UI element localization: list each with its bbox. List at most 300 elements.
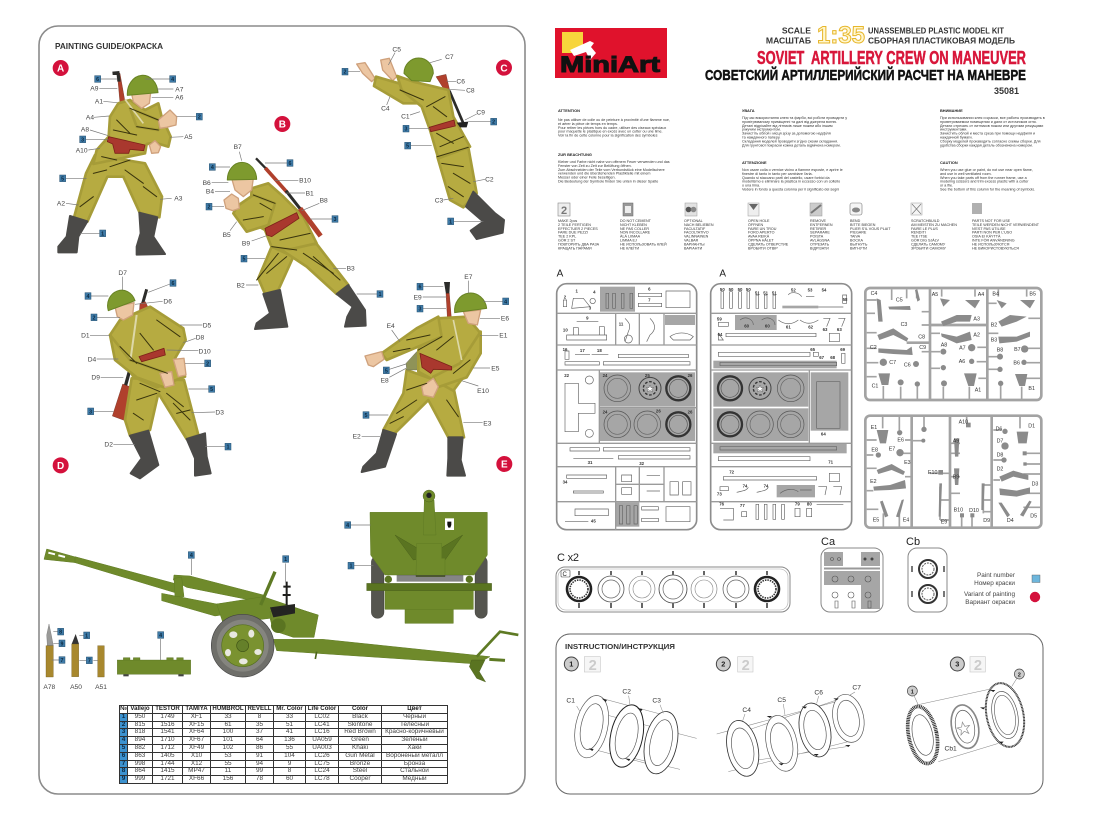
labels: soldier D: D8 [196, 335, 205, 342]
table: paint colour chart: 6 [122, 752, 125, 759]
sprue: Cb: Cb [906, 536, 920, 548]
symbol captions: BITTE BIEGEN [850, 223, 876, 227]
part numbers: E2 [870, 479, 877, 485]
part numbers A front: 26 [688, 373, 693, 378]
part numbers: A8 [941, 343, 947, 349]
text block: attention column 3: modeling scissors and trim excess plastic with a cutter [940, 180, 1029, 184]
heading: instruction: INSTRUCTION/ИНСТРУКЦИЯ [565, 642, 675, 651]
labels: soldier C: C1 [401, 114, 410, 121]
part numbers A rear: 61 [786, 324, 791, 329]
table: paint colour chart: 9 [288, 760, 291, 767]
table: paint colour chart: Skintone [348, 721, 372, 728]
part numbers: C6 [904, 363, 911, 369]
table: paint colour chart: 55 [286, 744, 293, 751]
table: paint colour chart: Хаки [407, 744, 422, 751]
table: paint colour chart: 11 [225, 767, 231, 774]
text block: attention column 1: et aérer la pièce de temps en temps. [558, 122, 618, 126]
labels: soldier A: A10 [76, 147, 88, 154]
part numbers A front: 1 [575, 288, 578, 293]
symbol captions: НЕ ВИКОРИСТОВУЮТЬСЯ [972, 246, 1019, 250]
step 3: 2 [1018, 672, 1021, 678]
part numbers A rear: 51 [763, 290, 769, 295]
part numbers A rear: 74 [743, 484, 748, 489]
part numbers: B6 [1013, 360, 1020, 366]
part numbers: D10 [969, 508, 979, 514]
step 3: 1 [911, 689, 914, 695]
table: paint colour chart: XF64 [189, 728, 204, 735]
symbol captions: FACOLTATIVO [684, 231, 709, 235]
symbol captions: OPEN HOLE [748, 219, 770, 223]
symbol captions: ВІДРІЗАТИ [810, 246, 829, 250]
labels: soldier D: 3 [89, 409, 92, 415]
kit number: 35081 [994, 86, 1019, 96]
symbol captions: ÄLÄ LIIMAA [620, 235, 641, 239]
labels: soldier B [203, 144, 383, 298]
table: paint colour chart: Телесный [400, 721, 429, 728]
labels: soldier C: C7 [445, 54, 454, 61]
paint number callouts: 7 [61, 658, 64, 664]
table: paint colour chart: 99 [256, 767, 263, 774]
step 2: C4 [742, 707, 751, 714]
part numbers: E3 [904, 460, 911, 466]
table: paint colour chart: Vallejo [130, 705, 150, 712]
labels: soldier C: C2 [485, 177, 494, 184]
ammunition: shells: A50 [70, 684, 82, 691]
labels: soldier A: A7 [175, 86, 184, 93]
text block: attention column 3: удобства сборки каждая деталь обозначена номером. [940, 143, 1033, 147]
table: paint colour chart: 818 [135, 728, 145, 735]
part numbers: E6 [897, 437, 904, 443]
part numbers A front: 26 [656, 408, 661, 413]
step 3: 3 [955, 660, 959, 669]
legend: paint number and variant [964, 572, 1040, 606]
sprue: A front [557, 268, 697, 530]
symbol captions: REMOVE [810, 219, 827, 223]
symbol captions: СДЕЛАТЬ ОТВЕРСТИЕ [748, 242, 789, 246]
heading: painting guide: PAINTING GUIDE/ОКРАСКА [55, 41, 163, 51]
part numbers A front: 10 [563, 328, 568, 333]
part numbers: C3 [901, 322, 907, 328]
step 2 [716, 657, 868, 779]
part numbers: D6 [996, 427, 1002, 433]
table: paint colour chart: Gun Metal [345, 752, 375, 759]
part numbers A rear: 50 [729, 287, 734, 292]
paint number callouts: 8 [59, 630, 62, 636]
table: paint colour chart: 104 [284, 752, 295, 759]
table: paint colour chart: 2 [122, 721, 125, 728]
icon: optional [685, 203, 697, 216]
step 1: 1 [569, 660, 573, 669]
table: paint colour chart: Красно-коричневый [385, 728, 444, 735]
sprue: A rear: A [719, 268, 726, 279]
labels: soldier A: A9 [90, 86, 99, 93]
table: paint colour chart: UA003 [312, 744, 332, 751]
labels: soldier E: E9 [414, 294, 422, 301]
table: paint colour chart: Green [351, 736, 369, 743]
symbol captions: ÖFFNEN [748, 223, 763, 227]
symbol captions: НЕ КЛЕЇТИ [620, 246, 639, 250]
illustration: artillery gun and ammunition [43, 490, 518, 691]
icon: remove [810, 203, 822, 216]
part numbers: E1 [871, 425, 877, 431]
figure: soldier C [342, 46, 512, 239]
heading: scale and kit type: SCALE [782, 26, 811, 36]
text block: attention column 3: CAUTION [940, 160, 958, 165]
text block: attention column 2: Деталі відрізайте від літників лише ножем або іншим [742, 124, 833, 128]
table: paint colour chart: 41 [286, 728, 293, 735]
paint number callouts: 9 [61, 641, 64, 647]
figure body parts [873, 423, 1032, 517]
table: paint colour chart: Red Brown [344, 728, 376, 735]
labels: soldier A: A6 [175, 95, 184, 102]
table: paint colour chart: XF15 [189, 721, 204, 728]
legend: paint number and variant: Вариант окраски [965, 599, 1015, 606]
symbol captions: BEND [850, 219, 861, 223]
labels: soldier B: B7 [234, 144, 242, 151]
part numbers A front: 26 [688, 409, 693, 414]
labels: soldier E: 5 [385, 368, 388, 374]
part numbers A rear: 65 [810, 347, 816, 352]
labels: soldier A: 5 [61, 176, 64, 182]
table: paint colour chart: Цвет [407, 705, 422, 712]
step 3: Cb1 [945, 746, 957, 753]
labels: soldier C: 2 [344, 70, 347, 76]
part numbers A front: 45 [591, 518, 596, 523]
part numbers: D3 [1032, 481, 1038, 487]
table: paint colour chart: 894 [135, 736, 145, 743]
labels: soldier A: A4 [86, 115, 94, 122]
table: paint colour chart: 1516 [160, 721, 175, 728]
sprue: A rear [711, 268, 852, 530]
part numbers A rear: 69 [840, 347, 846, 352]
table: paint colour chart: Зеленый [401, 736, 428, 743]
text block: attention column 3: Детали отрезать от литников ножом или другими режущими [940, 124, 1043, 128]
symbol captions: TEILE WERDEN NICHT VERWENDENT [972, 223, 1040, 227]
symbol captions: ПОВТОРИТЬ ДВА РАЗА [558, 242, 600, 246]
symbol captions: PARTS NOT FOR USE [972, 219, 1011, 223]
figure: soldier A [53, 60, 202, 255]
symbol captions: ENTFERNEN [810, 223, 833, 227]
symbol captions: INTE FÖR ANVÄNDNING [972, 238, 1015, 242]
text block: attention column 2: o una lima. [742, 184, 760, 188]
badge: variant A: A [57, 64, 64, 75]
part numbers A rear: 60 [744, 324, 750, 329]
labels: soldier C: C8 [466, 88, 475, 95]
icon: make twice: 2 [561, 205, 567, 217]
part numbers A rear: 50 [746, 287, 751, 292]
heading: scale and kit type: UNASSEMBLED PLASTIC MODEL KIT [868, 26, 1004, 36]
text block: attention column 1: Die Bedeutung der Symbole finden Sie unten in dieser Spalte [558, 180, 658, 184]
step 3 [903, 657, 1030, 766]
part numbers A rear [717, 287, 848, 508]
part numbers: A10 [959, 419, 968, 425]
table: paint colour chart: 8 [122, 767, 125, 774]
labels: soldier A: A3 [174, 196, 183, 203]
part numbers A front: 7 [648, 298, 651, 303]
badge: variant D: D [57, 461, 64, 472]
symbol captions: TEE 2 KPL [558, 235, 576, 239]
text block: attention column 3: When you take parts off from the runner frame, use a [940, 176, 1028, 180]
symbol captions: ЗРОБИТИ САМОМУ [911, 246, 947, 250]
symbol captions: PARTI NON PER L'USO [972, 231, 1012, 235]
part numbers A rear: 50 [738, 287, 743, 292]
symbol captions: SCRATCHBUILD [911, 219, 940, 223]
text block: attention column 2 [742, 108, 847, 192]
part numbers A rear: 60 [765, 324, 770, 329]
labels: soldier B: B8 [320, 198, 328, 205]
part numbers: E7 [889, 447, 895, 453]
table: paint colour chart: 882 [135, 744, 145, 751]
labels: soldier A: A2 [57, 201, 65, 208]
gun: side view [44, 549, 518, 682]
part numbers A front: 17 [580, 348, 585, 353]
labels: soldier C: 5 [406, 144, 409, 150]
heading: scale and kit type: СБОРНАЯ ПЛАСТИКОВАЯ МОДЕЛЬ [868, 36, 1015, 46]
part numbers: D4 [1007, 518, 1014, 524]
table: paint colour chart: 864 [135, 767, 145, 774]
symbol captions: SEPARARE [810, 231, 830, 235]
figure body parts [877, 289, 1035, 387]
logo: MiniArt [555, 28, 667, 78]
labels: soldier C: C9 [476, 109, 485, 116]
symbol captions: FARE DUE PEZZI [558, 231, 588, 235]
part numbers A front: 18 [597, 348, 602, 353]
labels: soldier A: A8 [81, 126, 89, 133]
table: paint colour chart: 7 [122, 760, 125, 767]
symbol legend [558, 203, 1040, 250]
labels: soldier B: B6 [203, 180, 211, 187]
icon: do not cement [623, 203, 633, 216]
part numbers: C2 [870, 345, 877, 351]
wheel rings on sprue C [567, 575, 779, 603]
table: paint colour chart: LC78 [314, 775, 330, 782]
text block: attention column 2: провітрюваному приміщенні та далі від джерела вогню. [742, 120, 837, 124]
text block: attention column 2: УВАГА [742, 108, 755, 113]
table: paint colour chart: 3 [122, 728, 125, 735]
labels: soldier D: D9 [91, 375, 100, 382]
labels: soldier E: E8 [381, 377, 389, 384]
symbol captions: PIEGARE [850, 231, 867, 235]
labels: soldier D: D1 [81, 333, 90, 340]
part numbers A front [563, 287, 693, 523]
table: paint colour chart: TESTOR [155, 705, 180, 712]
table: paint colour chart: Черный [403, 713, 426, 720]
labels: soldier B: 5 [243, 257, 246, 263]
text block: attention column 1: ZUR BEACHTUNG [558, 152, 592, 157]
table: paint colour chart: REVELL [247, 705, 272, 712]
paint number callouts: 4 [190, 553, 193, 559]
labels: soldier D [81, 270, 231, 451]
labels: soldier A: 3 [81, 137, 84, 143]
labels: soldier E: 5 [365, 413, 368, 419]
part numbers A rear: 50 [720, 287, 725, 292]
step 2: C6 [814, 689, 823, 696]
text block: attention column 2: Quando si staccano parti del castello, usare forbici da [742, 176, 830, 180]
labels: soldier D: D5 [203, 322, 212, 329]
table: paint colour chart: 33 [286, 713, 293, 720]
table: paint colour chart: 51 [286, 721, 293, 728]
table: paint colour chart: 78 [256, 775, 263, 782]
figure: soldier E [353, 274, 512, 476]
symbol captions: NE PAS COLLER [620, 227, 649, 231]
paint number callouts [52, 522, 373, 664]
part numbers A rear: 71 [828, 459, 834, 464]
labels: soldier B: 1 [379, 292, 382, 298]
table: paint colour chart: 94 [256, 760, 263, 767]
symbol captions: VALBAR [684, 238, 699, 242]
part numbers: E8 [871, 448, 878, 454]
step 2: 2 [742, 658, 750, 674]
table: paint colour chart: Mr. Color [276, 705, 303, 712]
labels: soldier E: E6 [501, 316, 509, 323]
table: paint colour chart: 999 [135, 775, 145, 782]
table: paint colour chart: X10 [191, 752, 202, 759]
part numbers: C7 [889, 360, 896, 366]
part numbers A front: 32 [639, 461, 645, 466]
part numbers A front: 3 [589, 306, 592, 311]
sprue: C x2: C x2 [557, 552, 579, 564]
labels: soldier C: 1 [449, 219, 452, 225]
title: Russian: СОВЕТСКИЙ АРТИЛЛЕРИЙСКИЙ РАСЧЕТ НА МАНЕВРЕ [705, 66, 1026, 84]
symbol captions: ВИГНУТИ [850, 246, 867, 250]
text block: attention column 3: See the bottom of this column for the meaning of symbols. [940, 188, 1035, 192]
labels: soldier B: B5 [223, 232, 231, 239]
symbol captions: VALINNAINEN [684, 235, 709, 239]
labels: soldier E: E4 [387, 323, 395, 330]
table: paint colour chart: 102 [223, 744, 233, 751]
symbol captions: 2 TEILE FERTIGEN [558, 223, 591, 227]
table: paint colour chart: № [120, 705, 127, 712]
part numbers A rear: 67 [819, 355, 825, 360]
table: paint colour chart: 8 [258, 713, 261, 720]
part numbers: E10 [928, 470, 937, 476]
labels: soldier B: 6 [289, 161, 292, 167]
labels: soldier D: D10 [199, 349, 211, 356]
symbol captions: ВЫГНУТЬ [850, 242, 868, 246]
step 2: C5 [777, 697, 786, 704]
part numbers: E5 [873, 518, 879, 524]
wheels on sprue A rear [718, 375, 804, 438]
step 1: 2 [589, 658, 597, 674]
symbol captions: BOCKA [850, 238, 863, 242]
labels: soldier A: 1 [101, 231, 104, 237]
part numbers: A2 [973, 333, 980, 339]
table: paint colour chart: 1749 [160, 713, 175, 720]
part numbers A rear: 63 [837, 327, 842, 332]
paint number callouts: 1 [284, 557, 287, 563]
part numbers: B2 [991, 323, 997, 329]
table: paint colour chart: LC24 [314, 767, 330, 774]
table: paint colour chart: 64 [256, 736, 263, 743]
badge: variant A [53, 60, 69, 76]
text block: attention column 2: Non usare colla o vernice vicino a fiamme esposte, e aprire le [742, 168, 843, 172]
table: paint colour chart: 156 [223, 775, 233, 782]
text block: attention column 3: проветриваемом помещении и дали от источников огня. [940, 120, 1037, 124]
part numbers: E4 [903, 518, 909, 524]
labels: soldier E: E2 [353, 434, 361, 441]
legend: paint number and variant: Variant of painting [964, 591, 1015, 598]
symbol captions: GÖR 2 ST [558, 238, 576, 242]
part numbers: D1 [1028, 424, 1035, 430]
step 1 [564, 657, 697, 777]
table: paint colour chart: 101 [223, 736, 233, 743]
text block: attention column 3: or a file. [940, 184, 953, 188]
symbol captions: TAIVA [850, 235, 861, 239]
table: paint colour chart: Вороненый металл [386, 752, 443, 759]
labels: soldier D: D4 [88, 356, 97, 363]
part numbers A rear: 68 [830, 355, 836, 360]
sprue: Ca [821, 536, 883, 612]
labels: soldier B: B3 [347, 266, 355, 273]
icon: bend [850, 203, 862, 215]
text block: attention column 2: Vedere in fondo a questa colonna per il significato dei segni [742, 188, 839, 192]
part numbers A front: 24 [603, 409, 608, 414]
part numbers: A4 [978, 292, 984, 298]
part numbers A rear: 77 [740, 503, 745, 508]
symbol captions: NON INCOLLARE [620, 231, 651, 235]
text block: attention column 1: Ne pas utiliser de colle ou de peinture à proximité d'une flamme nue, [558, 118, 670, 122]
labels: soldier D: D3 [215, 409, 224, 416]
symbol captions: ВАРИАНТЫ [684, 242, 705, 246]
symbol captions: NACH BELIEBEN [684, 223, 714, 227]
table: paint colour chart: 1405 [160, 752, 175, 759]
text block: attention column 3: When you use glue or paint, do not use near open flame, [940, 168, 1033, 172]
part numbers: C8 [918, 334, 925, 340]
table: paint colour chart: X12 [191, 760, 202, 767]
symbol captions: НЕ ИСПОЛЬЗУЮТСЯ [972, 242, 1010, 246]
step 2: 2 [721, 660, 725, 669]
table: paint colour chart: 5 [122, 744, 125, 751]
sprue: Ca: Ca [821, 536, 836, 548]
text block: attention column 3 [940, 108, 1045, 192]
labels: soldier B: B1 [306, 190, 314, 197]
table: paint colour chart: XF66 [189, 775, 204, 782]
badge: variant B [274, 116, 290, 132]
figure: soldier D [53, 270, 231, 478]
symbol captions: POISTA [810, 235, 824, 239]
part numbers: A1 [975, 388, 981, 394]
labels: soldier C: C3 [435, 197, 444, 204]
table: paint colour chart: LC26 [314, 752, 330, 759]
labels: soldier E: 6 [419, 285, 422, 291]
labels: soldier A [57, 76, 202, 237]
labels: soldier E [353, 274, 509, 441]
table: paint colour chart: 950 [135, 713, 145, 720]
paint number callouts: 1 [85, 633, 88, 639]
text block: attention column 1: verwenden und die überstehenden Plastikteile mit einem [558, 172, 650, 176]
icon: make twice [558, 203, 570, 217]
text block: attention column 2: Зачистіть облой і місця зрізу за допомогою надфіля [742, 132, 831, 136]
labels: soldier C: C4 [381, 106, 390, 113]
table: paint colour chart: Life Color [308, 705, 336, 712]
part numbers: C9 [919, 345, 926, 351]
table: paint colour chart: 1415 [160, 767, 175, 774]
logo: MiniArt: MiniArt [560, 52, 661, 77]
table: paint colour chart: XF67 [189, 736, 204, 743]
labels: soldier C: C5 [392, 46, 401, 53]
badge: variant C: C [500, 63, 508, 74]
text block: attention column 1: Pour retirer les pièces hors du cadre, utiliser des ciseaux spéciaux [558, 126, 666, 130]
table: paint colour chart: XF49 [189, 744, 204, 751]
table: paint colour chart: UA059 [312, 736, 332, 743]
symbol captions: FORO APERTO [748, 231, 775, 235]
text block: attention column 2: Під час використання клею та фарби, всі роботи проводити у [742, 116, 847, 120]
part numbers A rear: 58 [843, 297, 848, 302]
labels: soldier D: 2 [93, 315, 96, 321]
text block: attention column 3: and use in well ventilated room. [940, 172, 992, 176]
table: paint colour chart: 1721 [160, 775, 175, 782]
table: paint colour chart: 1541 [160, 728, 175, 735]
